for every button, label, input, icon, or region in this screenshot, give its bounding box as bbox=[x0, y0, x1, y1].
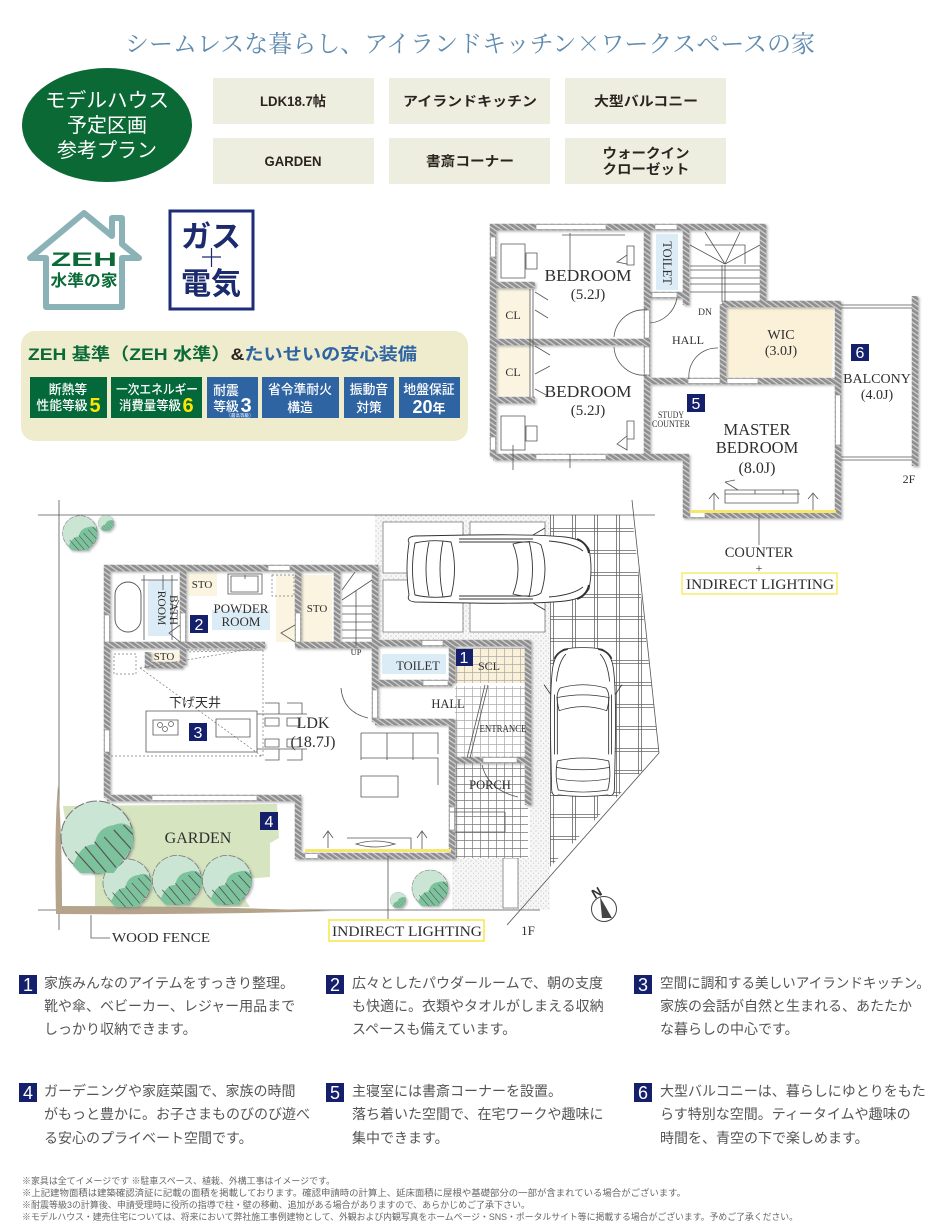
1F labels: STO bbox=[307, 603, 327, 615]
number 6 bbox=[851, 344, 869, 362]
feature tags: アイランドキッチン bbox=[403, 94, 537, 109]
1F labels: STO bbox=[154, 651, 174, 663]
badges: 消費量等級 bbox=[119, 398, 181, 413]
badges: 振動音 bbox=[350, 382, 388, 397]
badges: 20年 bbox=[412, 397, 446, 417]
2F labels: 2F bbox=[903, 472, 916, 486]
1F labels: BATH bbox=[167, 595, 179, 625]
paving tiles bbox=[550, 515, 659, 867]
bath and powder fittings bbox=[141, 575, 295, 642]
dining chairs bbox=[265, 703, 302, 760]
feature tags: 書斎コーナー bbox=[426, 153, 514, 169]
2F labels: BEDROOM bbox=[544, 266, 632, 285]
badges: 耐震 bbox=[213, 383, 239, 398]
1F stairs bbox=[342, 572, 372, 646]
badge: model house plan bbox=[22, 68, 192, 182]
kitchen island bbox=[146, 711, 307, 752]
2F labels: STUDY bbox=[658, 411, 684, 421]
2F labels: CL bbox=[505, 365, 521, 379]
note 3: 家族の会話が自然と生まれる、あたたか bbox=[660, 998, 912, 1014]
2F labels: MASTER bbox=[724, 420, 790, 439]
number 1: 1 bbox=[460, 650, 469, 667]
stairs bbox=[690, 232, 760, 302]
number 1 bbox=[456, 649, 473, 667]
badges: 等級 bbox=[213, 399, 239, 414]
2F labels: BEDROOM bbox=[716, 438, 799, 457]
counter callout: COUNTER bbox=[725, 545, 794, 561]
number 2 bbox=[190, 615, 208, 634]
badges: 地盤保証 bbox=[403, 382, 455, 397]
feature tags bbox=[213, 78, 726, 184]
2F labels: (3.0J) bbox=[765, 344, 797, 359]
compass: N bbox=[589, 884, 605, 901]
note 4 bbox=[19, 1083, 310, 1146]
2F labels bbox=[505, 241, 916, 486]
icon: gas plus electricity: ガス bbox=[181, 221, 241, 254]
2F walls bbox=[493, 227, 915, 515]
counter callout: INDIRECT LIGHTING bbox=[686, 577, 835, 593]
door arcs bbox=[341, 688, 518, 832]
site ground: gravel bbox=[375, 515, 550, 910]
closets fill bbox=[497, 289, 530, 396]
wood fence callout bbox=[91, 915, 210, 946]
1F labels: (18.7J) bbox=[291, 734, 335, 751]
2F labels: BALCONY bbox=[843, 372, 911, 387]
note 2: スペースも備えています。 bbox=[352, 1021, 516, 1037]
feature tags: ウォークイン bbox=[602, 146, 690, 161]
panel heading: ZEH 基準（ZEH 水準） &たいせいの安心装備 bbox=[28, 344, 417, 364]
badges: 性能等級 bbox=[36, 398, 88, 413]
icon: ZEH house: ZEH bbox=[51, 250, 117, 271]
number 3 bbox=[189, 723, 207, 742]
2F labels: WIC bbox=[767, 328, 795, 343]
1F windows and door openings bbox=[104, 566, 517, 858]
concrete slabs bbox=[383, 522, 545, 908]
2F labels: HALL bbox=[672, 333, 704, 347]
badges: 3 bbox=[240, 395, 252, 417]
1F labels: POWDER bbox=[214, 601, 269, 616]
note 2 bbox=[326, 975, 604, 1037]
note 5 bbox=[326, 1083, 603, 1146]
indirect lighting callout bbox=[329, 920, 484, 941]
feature tags: GARDEN bbox=[264, 154, 322, 169]
note 4: がもっと豊かに。お子さまものびのび遊べ bbox=[44, 1106, 310, 1122]
2F labels: (8.0J) bbox=[739, 460, 775, 477]
number 6: 6 bbox=[856, 345, 865, 362]
note 2: も快適に。衣類やタオルがしまえる収納 bbox=[352, 998, 604, 1014]
number 5: 5 bbox=[692, 396, 701, 413]
note 3: 3 bbox=[638, 975, 648, 995]
wood fence callout: WOOD FENCE bbox=[112, 931, 210, 946]
1F labels: GARDEN bbox=[165, 830, 232, 847]
2F labels: (5.2J) bbox=[571, 287, 605, 303]
footnotes: ※モデルハウス・建売住宅については、将来において弊社施工事例建物として、外観および内観写真をホームページ・SNS・ポータルサイト等に掲載する場合がございます。予めご了承ください。 bbox=[22, 1211, 798, 1222]
2F labels: DN bbox=[698, 308, 712, 318]
badges: 6 bbox=[182, 395, 194, 417]
1F labels: HALL bbox=[431, 697, 465, 711]
floor plan 2F bbox=[490, 224, 916, 594]
2F labels: TOILET bbox=[660, 241, 674, 285]
note 6: 時間を、青空の下で楽しめます。 bbox=[660, 1130, 869, 1146]
note 4: ガーデニングや家庭菜園で、家族の時間 bbox=[44, 1083, 295, 1099]
note 5: 5 bbox=[330, 1083, 340, 1103]
1F labels: 1F bbox=[521, 923, 535, 938]
footnotes: ※上記建物面積は建築確認済証に記載の面積を掲載しております。確認申請時の計算上、延床面積に屋根や基礎部分の一部が含まれている場合がございます。 bbox=[22, 1187, 686, 1198]
number 4: 4 bbox=[265, 814, 274, 831]
note 4: 4 bbox=[23, 1083, 33, 1103]
title: シームレスな暮らし、アイランドキッチン×ワークスペースの家 bbox=[125, 24, 815, 59]
feature tags: クローゼット bbox=[602, 161, 690, 177]
indirect light strip bbox=[690, 510, 836, 513]
garden green bbox=[63, 804, 279, 907]
compass bbox=[589, 884, 616, 922]
note 3: な暮らしの中心です。 bbox=[660, 1021, 799, 1037]
2F labels: (4.0J) bbox=[861, 388, 893, 403]
badge: model house plan: 参考プラン bbox=[57, 139, 157, 162]
number 2: 2 bbox=[195, 617, 204, 634]
note 4: る安心のプライベート空間です。 bbox=[44, 1130, 253, 1146]
note 1: 靴や傘、ベビーカー、レジャー用品まで bbox=[44, 998, 295, 1014]
2F labels: CL bbox=[505, 308, 521, 322]
note 6 bbox=[634, 1083, 926, 1146]
entrance diagonal bbox=[467, 685, 488, 758]
badges bbox=[30, 377, 460, 419]
basin bbox=[228, 574, 262, 594]
note 1: しっかり収納できます。 bbox=[44, 1021, 197, 1037]
badges: 〔最高等級〕 bbox=[226, 412, 254, 419]
door arcs bbox=[614, 298, 718, 379]
1F labels: ROOM bbox=[221, 614, 261, 629]
note 5: 落ち着いた空間で、在宅ワークや趣味に bbox=[352, 1106, 603, 1122]
badges: 一次エネルギー bbox=[116, 382, 198, 397]
2F labels: BEDROOM bbox=[544, 382, 632, 401]
1F labels: 下げ天井 bbox=[169, 695, 221, 710]
panel: ZEH equipment bbox=[21, 331, 468, 441]
trees bbox=[61, 515, 452, 909]
SCL, entrance, porch grids bbox=[455, 648, 525, 683]
feature tags: LDK18.7帖 bbox=[260, 94, 326, 109]
note 3 bbox=[634, 975, 930, 1037]
icon: ZEH house: 水準の家 bbox=[50, 271, 118, 290]
indirect lighting callout: INDIRECT LIGHTING bbox=[332, 924, 483, 940]
note 1: 1 bbox=[23, 975, 33, 995]
note 1 bbox=[19, 975, 295, 1037]
room fills bbox=[148, 573, 332, 662]
1F labels: ENTRANCE bbox=[480, 723, 527, 735]
car 1 bbox=[407, 528, 591, 610]
number 3: 3 bbox=[194, 725, 203, 742]
up arrows bbox=[709, 493, 818, 545]
1F labels bbox=[154, 579, 535, 938]
note 2: 広々としたパウダールームで、朝の支度 bbox=[352, 975, 603, 991]
1F labels: PORCH bbox=[469, 778, 511, 792]
counter callout bbox=[682, 545, 837, 594]
2F labels: COUNTER bbox=[652, 420, 691, 430]
wood fence bbox=[55, 785, 332, 914]
note 1: 家族みんなのアイテムをすっきり整理。 bbox=[44, 975, 294, 991]
badges: 対策 bbox=[356, 400, 382, 415]
badges: 断熱等 bbox=[49, 382, 87, 397]
badges: 5 bbox=[89, 395, 101, 417]
footnotes: ※耐震等級3の計算後、申請受理時に役所の指導で柱・壁の移動、追加がある場合がありますので、あらかじめご了承下さい。 bbox=[22, 1199, 530, 1210]
1F labels: STO bbox=[192, 579, 212, 591]
toilet fill bbox=[656, 234, 678, 290]
note 5: 集中できます。 bbox=[352, 1130, 449, 1146]
feature tags: 大型バルコニー bbox=[594, 93, 698, 109]
note 3: 空間に調和する美しいアイランドキッチン。 bbox=[660, 975, 930, 991]
badges: 構造 bbox=[287, 400, 313, 415]
1F labels: TOILET bbox=[396, 659, 440, 673]
footnotes bbox=[22, 1175, 798, 1222]
note 2: 2 bbox=[330, 975, 340, 995]
note 6: らす特別な空間。ティータイムや趣味の bbox=[660, 1106, 911, 1122]
site lines bbox=[38, 500, 659, 930]
note 5: 主寝室には書斎コーナーを設置。 bbox=[352, 1083, 562, 1099]
1F labels: SCL bbox=[478, 659, 500, 673]
1F labels: UP bbox=[351, 647, 362, 657]
desks and beds bbox=[501, 244, 800, 503]
badge: model house plan: モデルハウス bbox=[45, 89, 169, 112]
2F windows and door openings bbox=[490, 224, 840, 518]
note 6: 6 bbox=[638, 1083, 648, 1103]
badges: 省令準耐火 bbox=[268, 382, 332, 397]
2F labels: (5.2J) bbox=[571, 403, 605, 419]
balcony and fittings lines bbox=[513, 233, 912, 470]
icon: gas plus electricity: 電気 bbox=[181, 268, 241, 301]
WIC fill bbox=[727, 308, 834, 377]
icon: ZEH house bbox=[30, 213, 139, 307]
counter callout: + bbox=[756, 561, 763, 575]
1F labels: ROOM bbox=[155, 591, 167, 625]
indirect light strip 1F bbox=[305, 849, 451, 852]
1F walls bbox=[107, 568, 530, 856]
icon: gas plus electricity bbox=[170, 211, 253, 309]
footnotes: ※家具は全てイメージです ※駐車スペース、植栽、外構工事はイメージです。 bbox=[22, 1175, 335, 1186]
bathtub bbox=[115, 582, 141, 632]
note 6: 大型バルコニーは、暮らしにゆとりをもた bbox=[660, 1083, 926, 1099]
arrows bbox=[323, 831, 427, 919]
car 2 bbox=[544, 647, 622, 797]
badge: model house plan: 予定区画 bbox=[67, 114, 147, 137]
number 5 bbox=[687, 394, 705, 413]
number 4 bbox=[260, 812, 278, 831]
laundry and floor dashes bbox=[107, 575, 294, 757]
sofa bbox=[347, 733, 438, 850]
floor plan 1F bbox=[38, 500, 659, 946]
1F labels: LDK bbox=[297, 715, 330, 732]
